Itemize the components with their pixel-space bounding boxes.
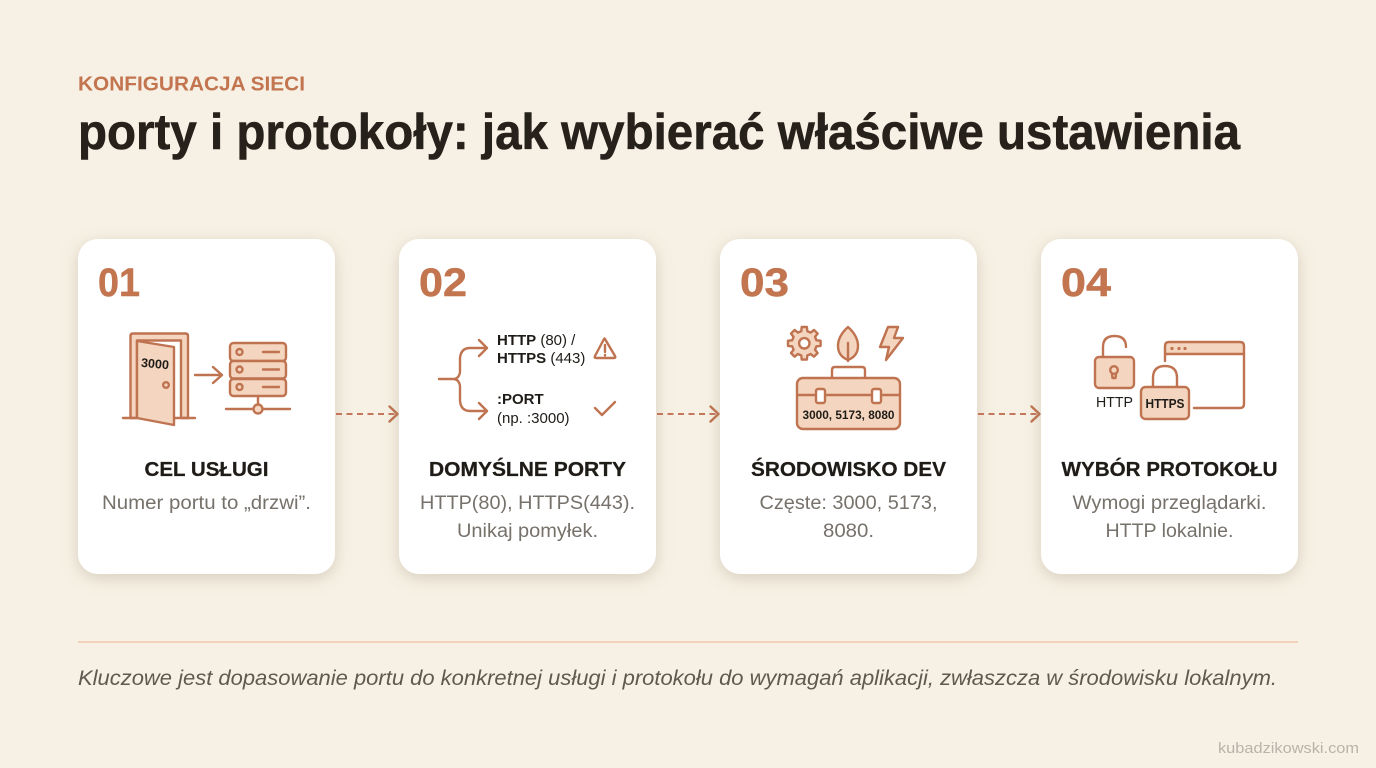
description bbox=[1072, 493, 1266, 542]
icon: branching port diagram: HTTP (80) / bbox=[497, 332, 576, 349]
description: Częste: 3000, 5173, bbox=[760, 493, 938, 514]
icon: branching port diagram: HTTPS (443) bbox=[497, 350, 585, 367]
step number 04: 04 bbox=[1061, 261, 1112, 305]
panel: card 4 bbox=[1041, 239, 1298, 574]
icon: open lock, closed lock, browser window: HTTP bbox=[1096, 394, 1133, 411]
arrow: step 1 to 2 bbox=[336, 406, 398, 422]
description: HTTP(80), HTTPS(443). bbox=[420, 493, 635, 514]
heading: DOMYŚLNE PORTY bbox=[429, 457, 627, 481]
step number 01: 01 bbox=[98, 261, 140, 305]
icon: branching port diagram: (np. :3000) bbox=[497, 410, 570, 427]
heading: ŚRODOWISKO DEV bbox=[751, 457, 947, 481]
title: porty i protokoły: jak wybierać właściwe ustawienia bbox=[78, 104, 1241, 160]
description: Wymogi przeglądarki. bbox=[1072, 493, 1266, 514]
description: Unikaj pomyłek. bbox=[457, 521, 598, 542]
description: HTTP lokalnie. bbox=[1106, 521, 1234, 542]
heading: WYBÓR PROTOKOŁU bbox=[1062, 457, 1278, 481]
icon: door to server bbox=[123, 334, 290, 425]
description bbox=[760, 493, 938, 542]
icon: branching port diagram: :PORT bbox=[497, 391, 544, 408]
arrow: step 3 to 4 bbox=[978, 406, 1040, 422]
step number 03: 03 bbox=[740, 261, 789, 305]
icon: door to server: 3000 bbox=[140, 356, 170, 372]
panel: card 1 bbox=[78, 239, 335, 574]
icon: open lock, closed lock, browser window: HTTPS bbox=[1146, 397, 1184, 411]
arrow: step 2 to 3 bbox=[657, 406, 718, 422]
panel: card 3 bbox=[720, 239, 977, 574]
description bbox=[420, 493, 635, 542]
watermark: kubadzikowski.com bbox=[1218, 740, 1359, 757]
panel: card 2 bbox=[399, 239, 656, 574]
step number 02: 02 bbox=[419, 261, 467, 305]
eyebrow heading: KONFIGURACJA SIECI bbox=[78, 72, 305, 96]
icon: toolbox with gear, leaf, bolt bbox=[788, 327, 903, 429]
icon: open lock, closed lock, browser window bbox=[1095, 336, 1244, 419]
heading: CEL USŁUGI bbox=[144, 459, 268, 481]
icon: toolbox with gear, leaf, bolt: 3000, 5173, 8080 bbox=[802, 410, 894, 422]
description: 8080. bbox=[823, 521, 874, 542]
description: Numer portu to „drzwi”. bbox=[102, 493, 311, 514]
summary text: Kluczowe jest dopasowanie portu do konkretnej usługi i protokołu do wymagań aplikacji, zwłaszcza w środowisku lokalnym. bbox=[78, 667, 1277, 690]
icon: branching port diagram bbox=[439, 332, 615, 427]
